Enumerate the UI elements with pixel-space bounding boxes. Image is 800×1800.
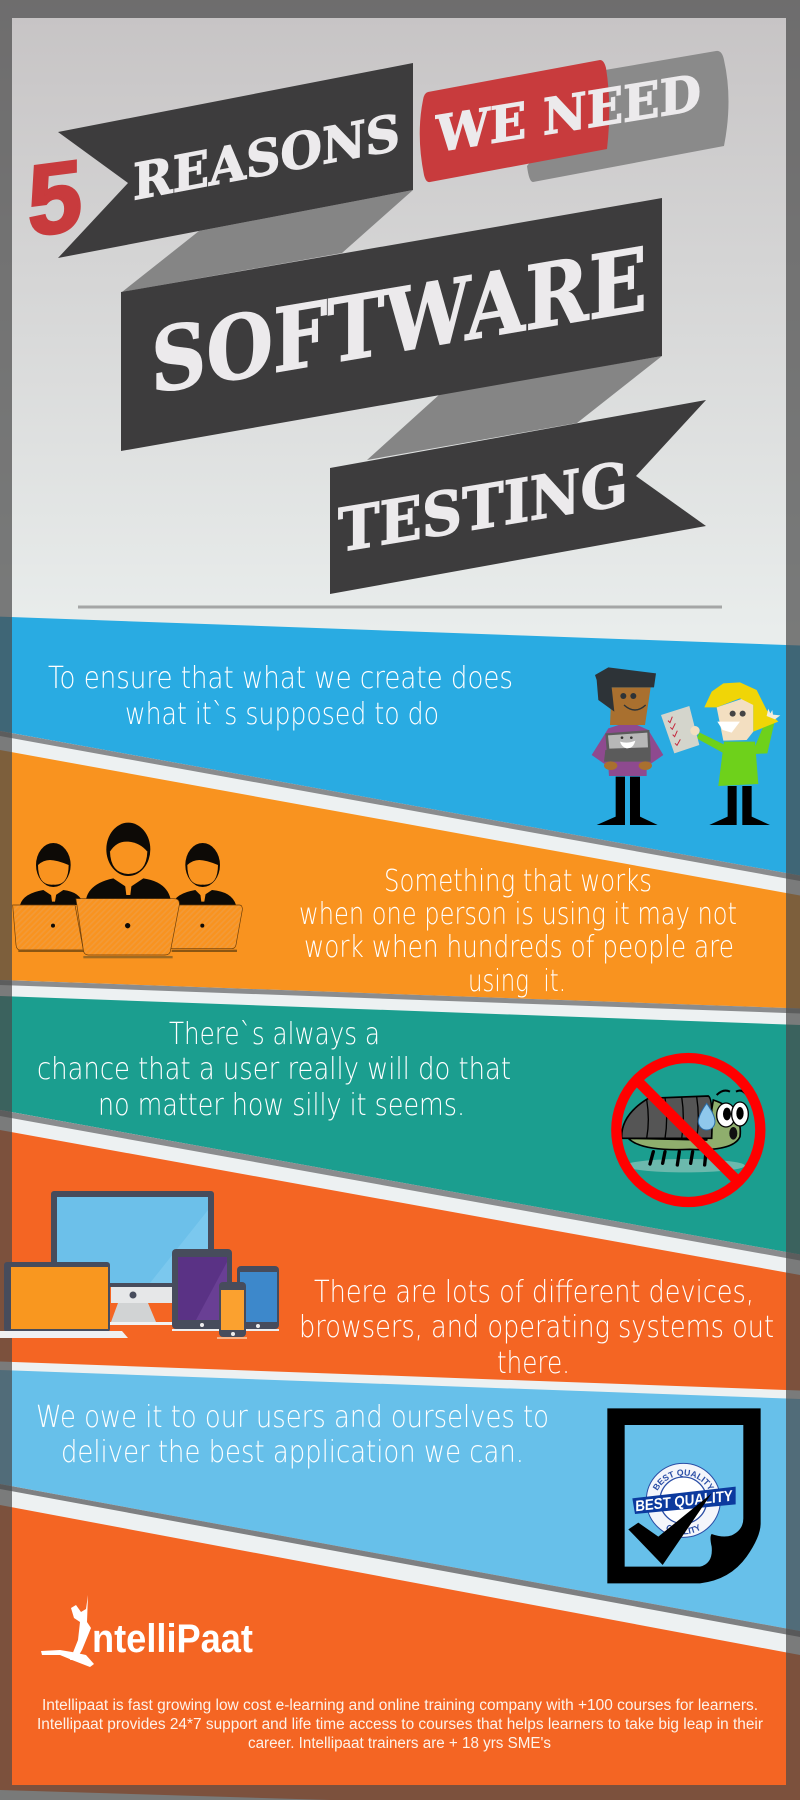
text: reason 2 (299, 864, 737, 999)
woman (661, 682, 780, 825)
check mark (628, 1493, 712, 1565)
icon: three people on laptops (13, 823, 242, 958)
text: reason 2: using it. (468, 964, 566, 999)
monitor (51, 1191, 214, 1325)
band: orange footer (0, 1505, 800, 1800)
text: reason 1: To ensure that what we create does (48, 661, 513, 696)
band: teal reason 3 (0, 996, 800, 1255)
bug (622, 1091, 748, 1165)
document outline (607, 1408, 761, 1583)
text: reason 1 (48, 661, 513, 732)
ribbon: software (121, 198, 662, 451)
quality seal (646, 1462, 720, 1538)
band divider 5 (0, 1484, 800, 1655)
band: orange reason 2 (0, 750, 800, 1009)
text: reason 3: no matter how silly it seems. (98, 1088, 465, 1123)
pill: red (420, 60, 609, 182)
tablet (172, 1249, 232, 1331)
quality seal: BEST QUALITY (652, 1469, 714, 1490)
ribbon folds (122, 190, 662, 460)
icon: two people with laptop and checklist (592, 667, 780, 825)
band divider 2 (0, 980, 800, 1025)
orange phone (217, 1282, 247, 1339)
logo: Intellipaat (41, 1595, 253, 1667)
footer text: Intellipaat is fast growing low cost e-learning and online training company with +100 courses for learners. (42, 1697, 758, 1714)
heading: testing: TESTING (338, 449, 628, 567)
logo figure (41, 1595, 94, 1667)
text: reason 3: There`s always a (169, 1017, 380, 1052)
ribbon: testing (330, 400, 706, 594)
band divider 1 (0, 731, 800, 896)
icon: devices (0, 1191, 279, 1339)
text: reason 3 (37, 1017, 511, 1123)
ribbon: reasons (58, 63, 413, 258)
pill: gray (527, 51, 728, 182)
man (592, 667, 663, 825)
icon: best quality document (607, 1408, 761, 1584)
text: reason 1: what it`s supposed to do (125, 697, 439, 732)
laptop (0, 1262, 128, 1338)
text: reason 5 (36, 1400, 549, 1470)
side person right (170, 843, 242, 952)
footer text: Intellipaat provides 24*7 support and life time access to courses that helps learners to take big leap in their (37, 1716, 763, 1733)
footer text: career. Intellipaat trainers are + 18 yrs SME's (248, 1735, 551, 1752)
bug shadow (625, 1159, 745, 1172)
quality seal: QUALITY (666, 1524, 700, 1534)
text: reason 5: deliver the best application we can. (61, 1435, 524, 1470)
text: reason 4: there. (497, 1346, 570, 1381)
title ribbons (28, 51, 728, 594)
band: orange reason 4 (0, 1130, 800, 1391)
text: reason 5: We owe it to our users and ourselves to (36, 1400, 549, 1435)
quality banner: BEST QUALITY (635, 1488, 733, 1515)
band: light blue reason 5 (0, 1370, 800, 1632)
heading: reasons: REASONS (133, 103, 400, 212)
icon: no bugs sign (616, 1058, 760, 1202)
side person left (13, 843, 85, 952)
prohibition sign (616, 1058, 760, 1202)
number 5: 5 (28, 139, 82, 258)
text: reason 3: chance that a user really will do that (37, 1052, 511, 1087)
band divider 3 (0, 1110, 800, 1275)
text: reason 2: Something that works (384, 864, 652, 899)
band: blue reason 1 (0, 617, 800, 876)
heading: we need: WE NEED (435, 63, 701, 164)
band divider 4 (0, 1362, 800, 1399)
title underline (78, 606, 722, 608)
text: reason 4 (299, 1275, 774, 1381)
heading: software: SOFTWARE (151, 227, 647, 414)
blue phone (237, 1266, 279, 1331)
footer text (37, 1697, 763, 1752)
center person (76, 823, 179, 958)
logo wordmark: ntelliPaat (92, 1617, 253, 1661)
